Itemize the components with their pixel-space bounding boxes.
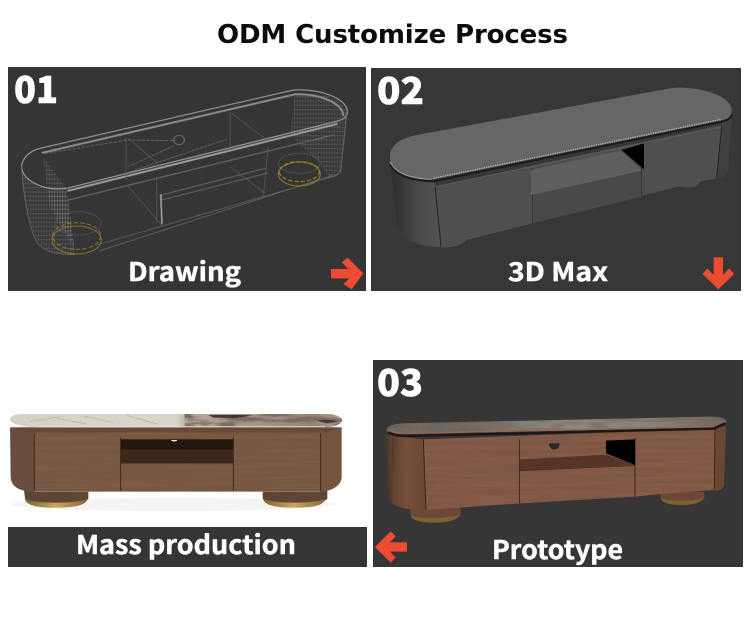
opening and drawer <box>606 439 635 465</box>
arrow: left <box>375 531 407 563</box>
stone top <box>387 417 727 434</box>
base rails <box>97 175 333 251</box>
panel: mass production <box>8 413 367 567</box>
feet <box>409 507 461 521</box>
side caps <box>387 435 426 510</box>
yellow foot rings <box>56 212 101 235</box>
label bar <box>8 527 367 567</box>
step number 03: 03 <box>377 353 423 407</box>
arrow: down <box>703 257 734 289</box>
marble top <box>10 414 342 427</box>
panel: step 03 prototype <box>373 353 743 567</box>
panel: step 02 3D Max <box>371 61 741 291</box>
front <box>423 429 715 510</box>
cabinet feet <box>24 490 88 505</box>
top rim <box>22 90 347 189</box>
3D model cabinet <box>390 88 732 247</box>
prototype cabinet render <box>387 416 727 523</box>
panel: step 01 drawing <box>8 60 366 291</box>
label: Mass production: Mass production <box>76 525 296 562</box>
label: 3D Max: 3D Max <box>508 252 608 289</box>
internal panels <box>126 138 162 227</box>
label: Prototype: Prototype <box>492 530 623 567</box>
wireframe cabinet drawing <box>22 90 347 254</box>
step number 01: 01 <box>14 60 58 114</box>
product photo cabinet <box>10 413 343 511</box>
top surface <box>390 88 732 180</box>
label: Drawing: Drawing <box>128 252 241 289</box>
arrow: right <box>331 258 363 289</box>
step number 02: 02 <box>377 61 424 115</box>
open drawer <box>622 143 644 169</box>
open shelf <box>121 439 233 463</box>
title: ODM Customize Process <box>217 20 568 50</box>
cabinet body <box>10 427 342 492</box>
